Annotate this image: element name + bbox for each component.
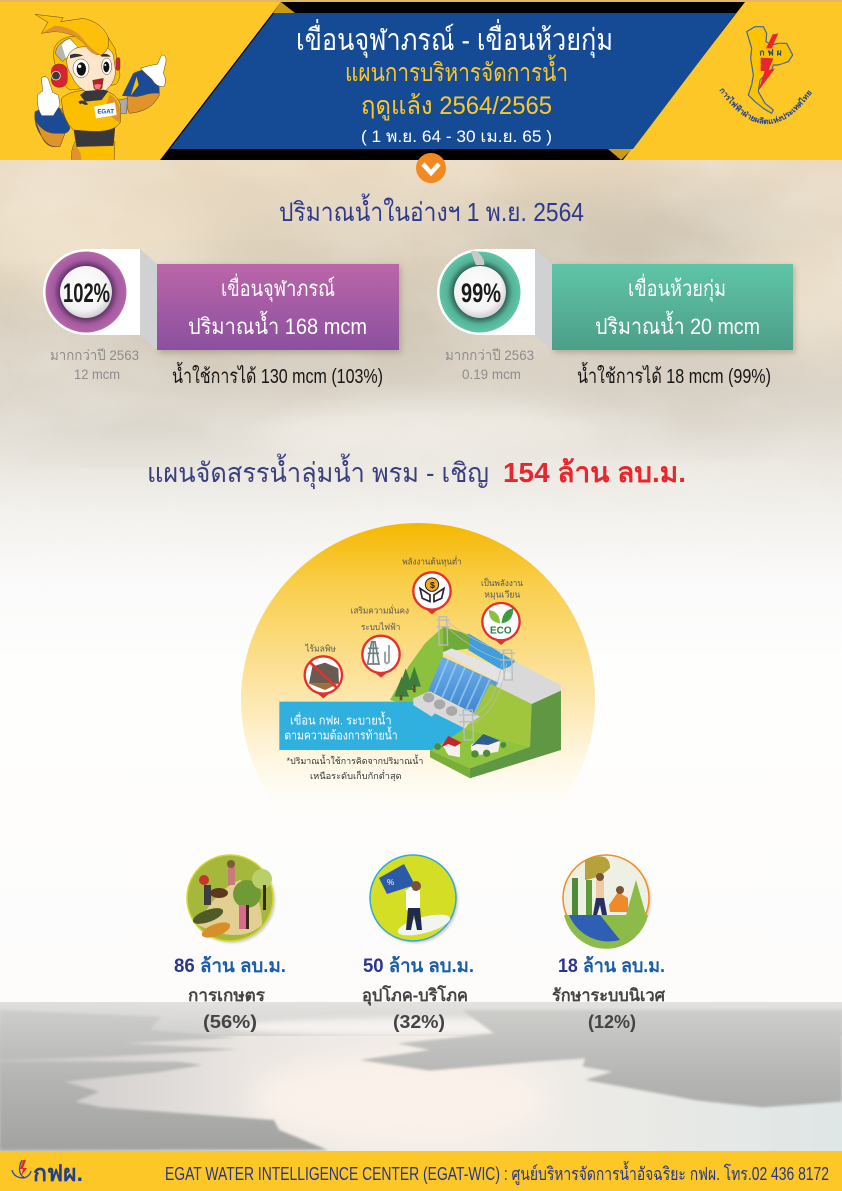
stats: consumption: (32%) <box>393 1012 445 1032</box>
item: consumption: % <box>387 878 394 887</box>
panel: Huai Kum dam <box>437 249 795 388</box>
panel: Chulabhorn dam: ปริมาณน้ำ 168 mcm <box>188 311 367 339</box>
houses <box>434 734 506 758</box>
yellow sun circle <box>241 523 595 877</box>
pin labels: เสริมความมั่นคง <box>351 604 409 615</box>
panel: Chulabhorn dam: น้ำใช้การได้ 130 mcm (103%) <box>172 362 383 388</box>
callout: release text: เขื่อน กฟผ. ระบายน้ำ <box>290 712 392 728</box>
icon: EGAT Thailand map logo: กฟผ <box>759 48 782 58</box>
footnote: เหนือระดับเก็บกักต่ำสุด <box>310 769 402 782</box>
pin: no pollution <box>305 656 342 698</box>
footer bar <box>0 1151 842 1191</box>
panel: Huai Kum dam: มากกว่าปี 2563 <box>445 347 534 363</box>
title text: ( 1 พ.ย. 64 - 30 เม.ย. 65 ) <box>361 127 552 146</box>
title text: เขื่อนจุฬาภรณ์ - เขื่อนห้วยกุ่ม <box>296 19 613 59</box>
stats: ecosystem <box>552 955 666 1032</box>
panel: Chulabhorn dam: มากกว่าปี 2563 <box>50 347 139 363</box>
stats: agriculture: การเกษตร <box>188 986 266 1005</box>
gauge: 99%: 99% <box>461 278 501 308</box>
title text: แผนการบริหารจัดการน้ำ <box>345 54 568 87</box>
item: consumption <box>370 855 458 943</box>
stats: ecosystem: 18 ล้าน ลบ.ม. <box>558 955 665 977</box>
pin labels <box>304 556 523 654</box>
pin: renewable ECO <box>482 603 520 645</box>
gauge: 99% <box>440 251 520 332</box>
icon: footer logo: กฟผ. <box>33 1160 83 1186</box>
heading: allocation plan: แผนจัดสรรน้ำลุ่มน้ำ พรม - เชิญ <box>147 453 489 490</box>
stats: ecosystem: (12%) <box>588 1012 636 1032</box>
stats: agriculture: (56%) <box>203 1012 257 1032</box>
panel: Huai Kum dam: 0.19 mcm <box>462 366 521 382</box>
pin labels: ระบบไฟฟ้า <box>361 622 400 632</box>
pin: low cost energy <box>413 572 451 614</box>
panel: Huai Kum dam: ปริมาณน้ำ 20 mcm <box>595 311 760 339</box>
pin: grid stability <box>362 636 400 678</box>
panel: Chulabhorn dam <box>43 249 401 388</box>
heading: reservoir volume: ปริมาณน้ำในอ่างฯ 1 พ.ย. 2564 <box>279 193 584 227</box>
header banner <box>0 0 842 183</box>
heading: allocation plan <box>147 453 686 490</box>
item: agriculture <box>187 855 275 943</box>
title text <box>296 19 613 146</box>
item: ecosystem <box>563 855 651 949</box>
pin labels: เป็นพลังงาน <box>481 577 523 588</box>
callout: release text: ตามความต้องการท้ายน้ำ <box>284 726 398 742</box>
icon: EGAT mascot <box>35 14 166 162</box>
callout: release text <box>284 712 398 742</box>
footnote: *ปริมาณน้ำใช้การคิดจากปริมาณน้ำ <box>287 754 423 766</box>
title text: ฤดูแล้ง 2564/2565 <box>361 92 552 121</box>
panel: Huai Kum dam: เขื่อนห้วยกุ่ม <box>628 273 726 302</box>
footnote <box>287 754 423 782</box>
stats: ecosystem: รักษาระบบนิเวศ <box>552 986 666 1005</box>
icon: EGAT mascot: EGAT <box>97 108 114 115</box>
trees <box>394 667 421 700</box>
transmission towers <box>437 617 515 740</box>
icon: EGAT Thailand map logo: การไฟฟ้าฝ่ายผลิตแห่งประเทศไทย <box>719 88 812 124</box>
pin labels: พลังงานต้นทุนต่ำ <box>402 556 462 568</box>
panel: Chulabhorn dam: 12 mcm <box>74 366 120 382</box>
stats: consumption: อุปโภค-บริโภค <box>362 985 468 1006</box>
heading: allocation plan: 154 ล้าน ลบ.ม. <box>503 457 686 488</box>
pin: low cost energy: $ <box>430 580 435 590</box>
stats: consumption: 50 ล้าน ลบ.ม. <box>363 955 474 977</box>
stats: consumption <box>362 955 474 1032</box>
pin labels: ไร้มลพิษ <box>304 644 336 654</box>
icon: EGAT Thailand map logo <box>719 26 812 124</box>
pin labels: หมุนเวียน <box>484 589 520 600</box>
icon: orange chevron <box>416 153 446 183</box>
gauge: 102%: 102% <box>63 278 110 308</box>
chart: dam illustration <box>279 556 561 782</box>
panel: Huai Kum dam: น้ำใช้การได้ 18 mcm (99%) <box>577 362 771 388</box>
panel: Chulabhorn dam: เขื่อนจุฬาภรณ์ <box>221 273 335 302</box>
stats: agriculture: 86 ล้าน ลบ.ม. <box>174 955 286 977</box>
stats: agriculture <box>174 955 286 1032</box>
gauge: 102% <box>46 252 126 332</box>
pin: renewable ECO: ECO <box>490 625 512 636</box>
